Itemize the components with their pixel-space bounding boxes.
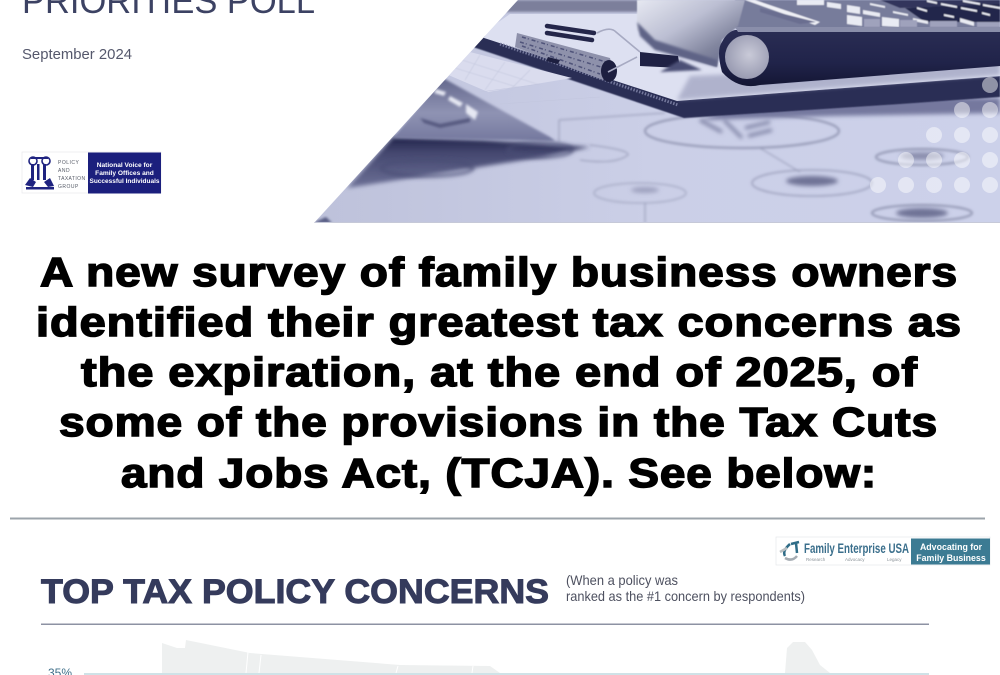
logo: Policy and Taxation Group [22, 152, 161, 194]
icon: triangle swirl [780, 542, 799, 560]
dark roller [719, 30, 1000, 86]
black binder [640, 52, 680, 68]
document circles [559, 113, 972, 223]
logo: Policy and Taxation Group: Successful Individuals [90, 178, 160, 185]
logo: Policy and Taxation Group: TAXATION [58, 176, 85, 182]
logo: Policy and Taxation Group: National Voice for [97, 162, 153, 169]
chart subtitle: ranked as the #1 concern by respondents) [566, 588, 805, 604]
logo: Family Enterprise USA: Family Business [916, 553, 986, 563]
handwritten letters on document [700, 120, 772, 138]
chart subtitle: (When a policy was [566, 572, 678, 588]
logo: Policy and Taxation Group: Family Offices and [95, 170, 154, 177]
chart title: TOP TAX POLICY CONCERNS [41, 573, 549, 611]
main headline: A new survey of family business owners [40, 249, 958, 295]
icon: column emblem [25, 157, 54, 190]
chart subtitle [566, 572, 805, 604]
clipboard paper [478, 14, 1000, 101]
chart gridline [84, 673, 929, 675]
chart background: US map silhouette [162, 640, 830, 673]
logo: Family Enterprise USA: Family Enterprise USA [804, 540, 909, 556]
binder clip [515, 33, 612, 80]
logo: Family Enterprise USA: Research [806, 557, 826, 562]
header photo: desk with clipboard, pen and keyboard [300, 0, 1000, 224]
logo: Family Enterprise USA: Advocacy [845, 557, 865, 562]
blurred shadow under laptop [347, 137, 590, 188]
logo: Family Enterprise USA [776, 537, 990, 565]
blurred ellipses in shadow [381, 143, 572, 176]
decorative dot grid [870, 77, 998, 193]
clipboard textured edge [500, 44, 678, 105]
main headline: some of the provisions in the Tax Cuts [59, 399, 938, 445]
main headline: identified their greatest tax concerns as [36, 299, 962, 345]
top strip [505, 0, 640, 12]
binder wire [597, 29, 640, 72]
logo: Policy and Taxation Group: GROUP [58, 184, 79, 190]
main headline [36, 249, 962, 496]
logo: Policy and Taxation Group: POLICY [58, 160, 80, 166]
silver pen body [637, 0, 745, 67]
bottom-left dark corner [313, 217, 332, 223]
logo: Family Enterprise USA: Advocating for [920, 542, 983, 552]
blurred keys [420, 89, 478, 128]
keyboard [735, 0, 1000, 28]
roller end cap [725, 35, 769, 79]
shadow under clipboard [700, 98, 1000, 120]
clipboard dark base [470, 34, 1000, 118]
grid paper [446, 52, 572, 92]
laptop body [393, 78, 555, 141]
report date: September 2024 [22, 46, 132, 63]
blurred marks inside circles [631, 152, 948, 218]
main headline: the expiration, at the end of 2025, of [81, 349, 918, 395]
logo: Family Enterprise USA: Legacy [887, 557, 902, 562]
logo: Policy and Taxation Group: AND [58, 168, 70, 174]
main headline: and Jobs Act, (TCJA). See below: [121, 450, 877, 496]
clip handles [547, 26, 594, 40]
